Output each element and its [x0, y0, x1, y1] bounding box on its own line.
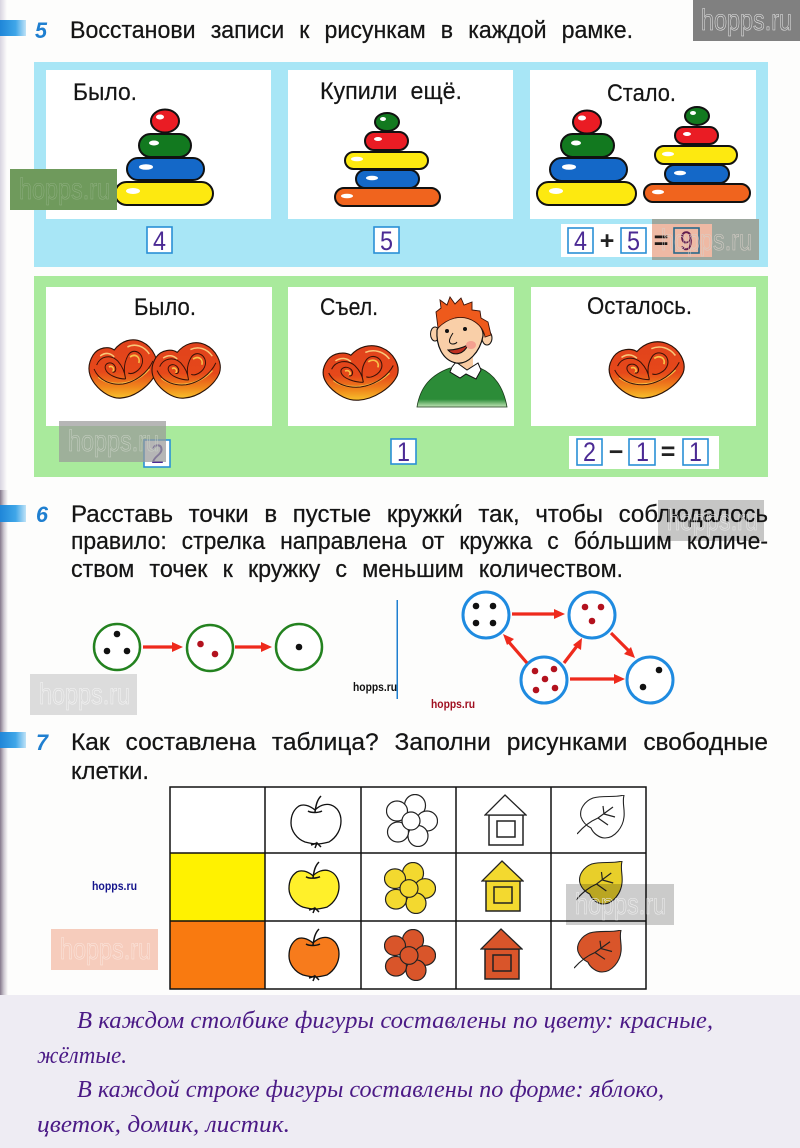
card: было	[46, 287, 272, 426]
row: orange shapes	[289, 929, 621, 981]
number box 2: 2	[151, 439, 164, 469]
watermark: pink: hopps.ru	[661, 224, 752, 257]
card: съел	[288, 287, 514, 426]
exercise 5 heading: 5	[35, 18, 48, 43]
equation 2-1=1: 2	[583, 437, 596, 467]
watermark: grey over green panel	[59, 421, 166, 462]
number box 4	[147, 226, 172, 256]
row: yellow shapes	[289, 861, 622, 914]
icon: boy	[417, 297, 507, 407]
small label: black hopps.ru: hopps.ru	[353, 680, 397, 694]
watermark: green	[10, 169, 117, 210]
small label: red hopps.ru: hopps.ru	[431, 697, 475, 711]
equation 2-1=1: −	[609, 438, 623, 466]
number box 5: 5	[380, 226, 393, 256]
card: осталось	[531, 287, 756, 426]
watermark: grey right of exercise 6: hopps.ru	[667, 504, 758, 537]
exercise 5 heading: Восстанови записи к рисункам в каждой рамке.	[70, 17, 633, 44]
answer panel: handwritten text: В каждой строке фигуры составлены по форме: яблоко,	[77, 1077, 664, 1103]
exercise 7 heading: клетки.	[71, 758, 149, 785]
exercise 6 heading: Расставь точки в пустые кружки́ так, чтобы соблюдалось	[71, 501, 768, 528]
answer panel: handwritten text: жёлтые.	[37, 1043, 127, 1069]
card: осталось: Осталось.	[587, 293, 692, 320]
equation 4+5=9: 5	[627, 226, 640, 256]
table of shapes	[170, 787, 646, 989]
small label: blue hopps.ru: hopps.ru	[92, 879, 137, 893]
card: стало	[530, 70, 756, 219]
exercise 7 heading: Как составлена таблица? Заполни рисунками свободные	[71, 729, 768, 756]
watermark: green: hopps.ru	[19, 173, 110, 206]
watermark: grey over table: hopps.ru	[575, 888, 666, 921]
exercise 6 heading	[0, 501, 768, 583]
watermark: grey over green panel: hopps.ru	[68, 425, 159, 458]
answer panel: handwritten text	[0, 995, 800, 1148]
panel: blue addition frame	[34, 62, 768, 267]
number box 2	[144, 439, 170, 469]
watermark: grey left of exercise 6	[30, 674, 137, 715]
panel: green subtraction frame	[34, 276, 768, 477]
card: съел: Съел.	[320, 294, 378, 321]
exercise 6 heading: правило: стрелка направлена от кружка с бо́льшим количе-	[71, 528, 768, 555]
card: купили ещё: Купили ещё.	[320, 78, 462, 105]
card: было: Было.	[73, 79, 137, 106]
answer panel: handwritten text: В каждом столбике фигуры составлены по цвету: красные,	[77, 1008, 713, 1034]
row: white shapes	[291, 794, 624, 848]
equation 4+5=9: +	[600, 227, 614, 255]
diagram: blue graph of circles	[463, 592, 673, 703]
watermark: grey right of exercise 6	[658, 500, 764, 541]
watermark: pink left of table	[51, 929, 158, 970]
watermark: grey left of exercise 6: hopps.ru	[39, 678, 130, 711]
number box 1	[391, 437, 416, 467]
equation 4+5=9: 4	[574, 226, 587, 256]
number box 4: 4	[153, 226, 166, 256]
watermark: grey over table	[566, 884, 674, 925]
diagram: green chain of circles	[94, 624, 322, 671]
divider line	[396, 600, 398, 699]
equation 4+5=9	[561, 224, 712, 257]
exercise 6 heading: ством точек к кружку с меньшим количеством.	[71, 556, 623, 583]
equation 2-1=1: 1	[636, 437, 649, 467]
watermark: pink	[652, 219, 759, 260]
exercise 6 heading: 6	[36, 502, 49, 527]
equation 2-1=1: =	[661, 438, 675, 466]
watermark: pink left of table: hopps.ru	[60, 933, 151, 966]
answer panel: handwritten text: цветок, домик, листик.	[37, 1112, 290, 1138]
equation 4+5=9: =	[654, 227, 668, 255]
card: стало: Стало.	[607, 80, 676, 107]
exercise 7 heading	[0, 729, 768, 785]
exercise 7 heading: 7	[36, 730, 50, 755]
card: купили ещё	[288, 70, 513, 219]
equation 4+5=9: 9	[680, 226, 693, 256]
card: было: Было.	[134, 294, 196, 321]
equation 2-1=1	[569, 436, 719, 469]
card: было	[46, 70, 271, 219]
number box 1: 1	[397, 437, 410, 467]
number box 5	[374, 226, 399, 256]
equation 2-1=1: 1	[689, 437, 702, 467]
